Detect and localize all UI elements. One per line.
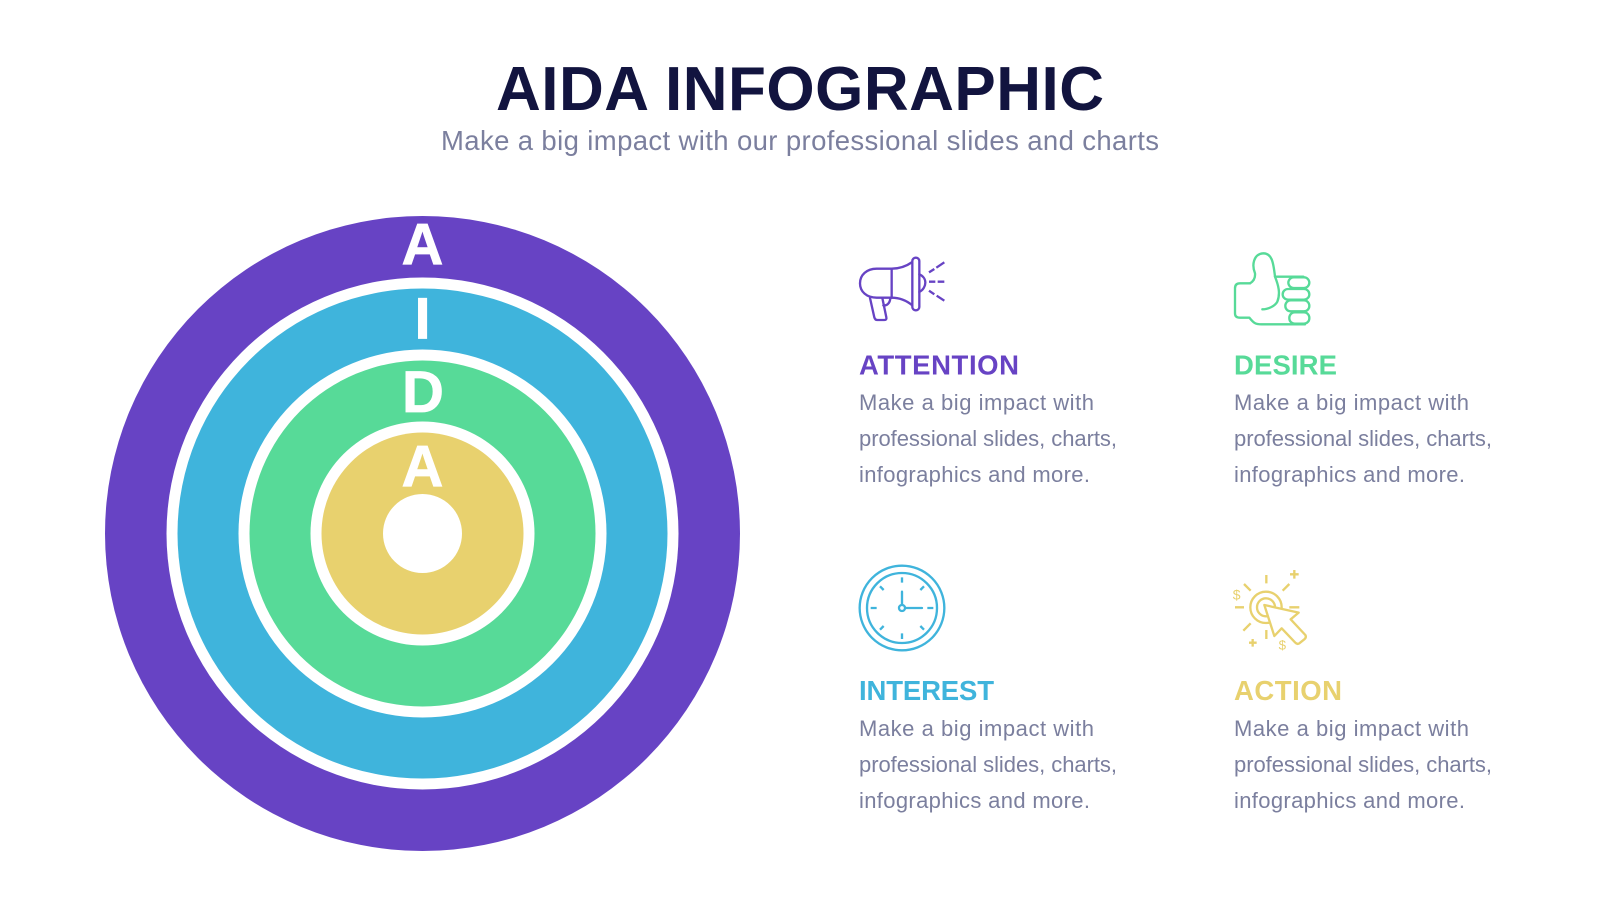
subtitle: Make a big impact with our professional slides and charts [441,125,1159,156]
description: attention: professional slides, charts, [859,426,1117,451]
heading: attention: ATTENTION [859,350,1019,380]
icon: thumbs up [1235,253,1309,324]
description: interest [859,716,1117,813]
heading: interest: INTEREST [859,675,994,706]
title: AIDA INFOGRAPHIC [496,55,1104,124]
icon: clock [860,566,944,650]
description: action [1234,716,1492,813]
description: attention [859,390,1117,487]
letter A: attention ring: A [402,212,443,277]
letter I: interest ring: I [414,286,431,351]
description: action: infographics and more. [1234,788,1465,813]
heading: action: ACTION [1234,675,1342,706]
panel: action [1233,570,1492,813]
description: desire: infographics and more. [1234,462,1465,487]
panel: attention [859,258,1117,487]
description: desire: professional slides, charts, [1234,426,1492,451]
icon: click cursor [1233,570,1306,652]
description: action: professional slides, charts, [1234,752,1492,777]
heading: desire: DESIRE [1234,350,1337,380]
description: action: Make a big impact with [1234,716,1469,741]
description: interest: Make a big impact with [859,716,1094,741]
description: interest: professional slides, charts, [859,752,1117,777]
letter A: action ring: A [402,435,443,500]
panel: interest [859,566,1117,813]
concentric AIDA circle chart [105,212,740,851]
icon: click cursor: $ [1233,586,1241,602]
description: attention: Make a big impact with [859,390,1094,415]
description: desire: Make a big impact with [1234,390,1469,415]
description: interest: infographics and more. [859,788,1090,813]
description: attention: infographics and more. [859,462,1090,487]
icon: megaphone [860,258,944,320]
description: desire [1234,390,1492,487]
panel: desire [1234,253,1492,487]
letter D: desire ring: D [402,360,444,425]
icon: click cursor: $ [1279,637,1287,652]
